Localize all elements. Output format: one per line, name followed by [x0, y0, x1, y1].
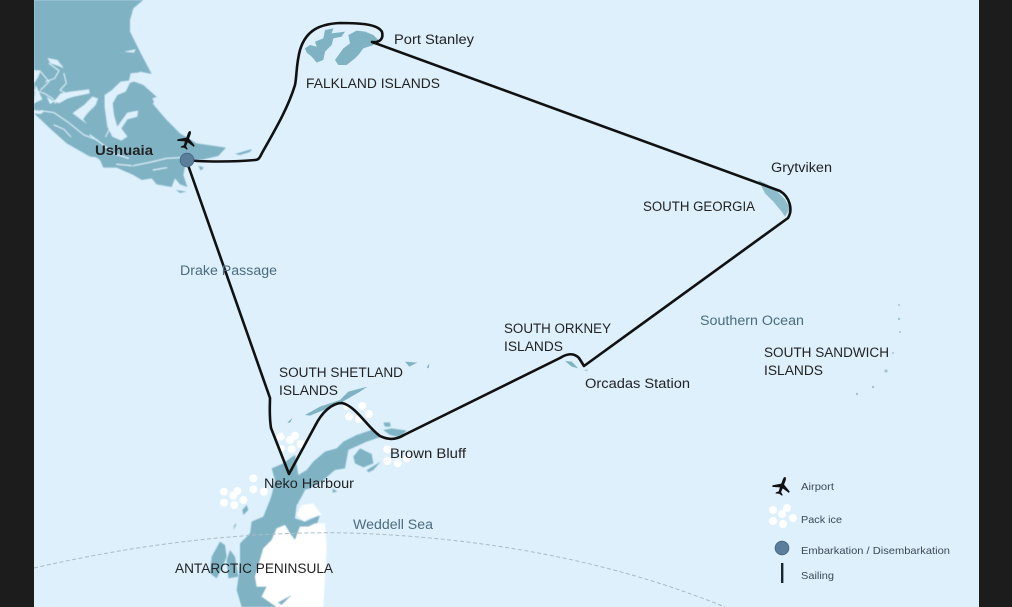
label: Southern Ocean: Southern Ocean	[700, 313, 804, 328]
land: South America	[34, 0, 252, 193]
fjords and channels	[34, 49, 162, 141]
label: Port Stanley: Port Stanley	[394, 32, 474, 47]
legend icon: airport	[770, 474, 794, 498]
label: South Sandwich Islands: ISLANDS	[764, 363, 823, 378]
sailing route	[187, 23, 790, 474]
legend label: airport: Airport	[801, 481, 834, 493]
label: Falkland Islands: FALKLAND ISLANDS	[306, 76, 440, 91]
label: South Orkney Islands: SOUTH ORKNEY	[504, 321, 611, 336]
south-west islands	[73, 135, 204, 193]
legend icon: sailing line	[781, 563, 783, 583]
label: Drake Passage: Drake Passage	[180, 263, 277, 278]
label: South Orkney Islands	[504, 321, 611, 354]
land: Antarctic Peninsula	[210, 422, 407, 607]
legend	[769, 474, 950, 583]
label: Weddell Sea: Weddell Sea	[353, 517, 434, 532]
ice shelf	[255, 523, 327, 607]
pack ice	[220, 402, 411, 509]
sea labels	[180, 263, 804, 532]
place labels	[95, 32, 889, 576]
legend label: pack ice: Pack ice	[801, 514, 842, 526]
label: Brown Bluff: Brown Bluff	[390, 446, 466, 461]
legend label: embarkation: Embarkation / Disembarkation	[801, 545, 950, 557]
legend icon: embarkation marker	[775, 541, 789, 555]
legend label: sailing: Sailing	[801, 570, 834, 582]
land: South Georgia	[758, 180, 790, 217]
label: Ushuaia: Ushuaia	[95, 143, 154, 158]
legend icon: pack ice	[769, 504, 797, 528]
dashed latitude line: Antarctic Circle	[34, 533, 725, 607]
land: South Sandwich Islands	[856, 304, 901, 395]
land: Falkland Islands	[305, 28, 378, 65]
label: South Sandwich Islands: SOUTH SANDWICH	[764, 345, 889, 360]
label: South Shetland Islands: SOUTH SHETLAND	[279, 365, 403, 380]
label: Antarctic Peninsula: ANTARCTIC PENINSULA	[175, 561, 333, 576]
embarkation marker: Ushuaia	[180, 153, 194, 167]
label: South Shetland Islands	[279, 365, 403, 398]
label: Grytviken: Grytviken	[771, 160, 832, 175]
label: South Georgia: SOUTH GEORGIA	[643, 199, 755, 214]
label: South Shetland Islands: ISLANDS	[279, 383, 338, 398]
label: Orcadas Station: Orcadas Station	[585, 376, 690, 391]
label: South Sandwich Islands	[764, 345, 889, 378]
label: Neko Harbour: Neko Harbour	[264, 476, 355, 491]
icon: airport at Ushuaia	[175, 128, 199, 152]
label: South Orkney Islands: ISLANDS	[504, 339, 563, 354]
land: South Shetland and South Orkney Islands	[287, 361, 589, 423]
